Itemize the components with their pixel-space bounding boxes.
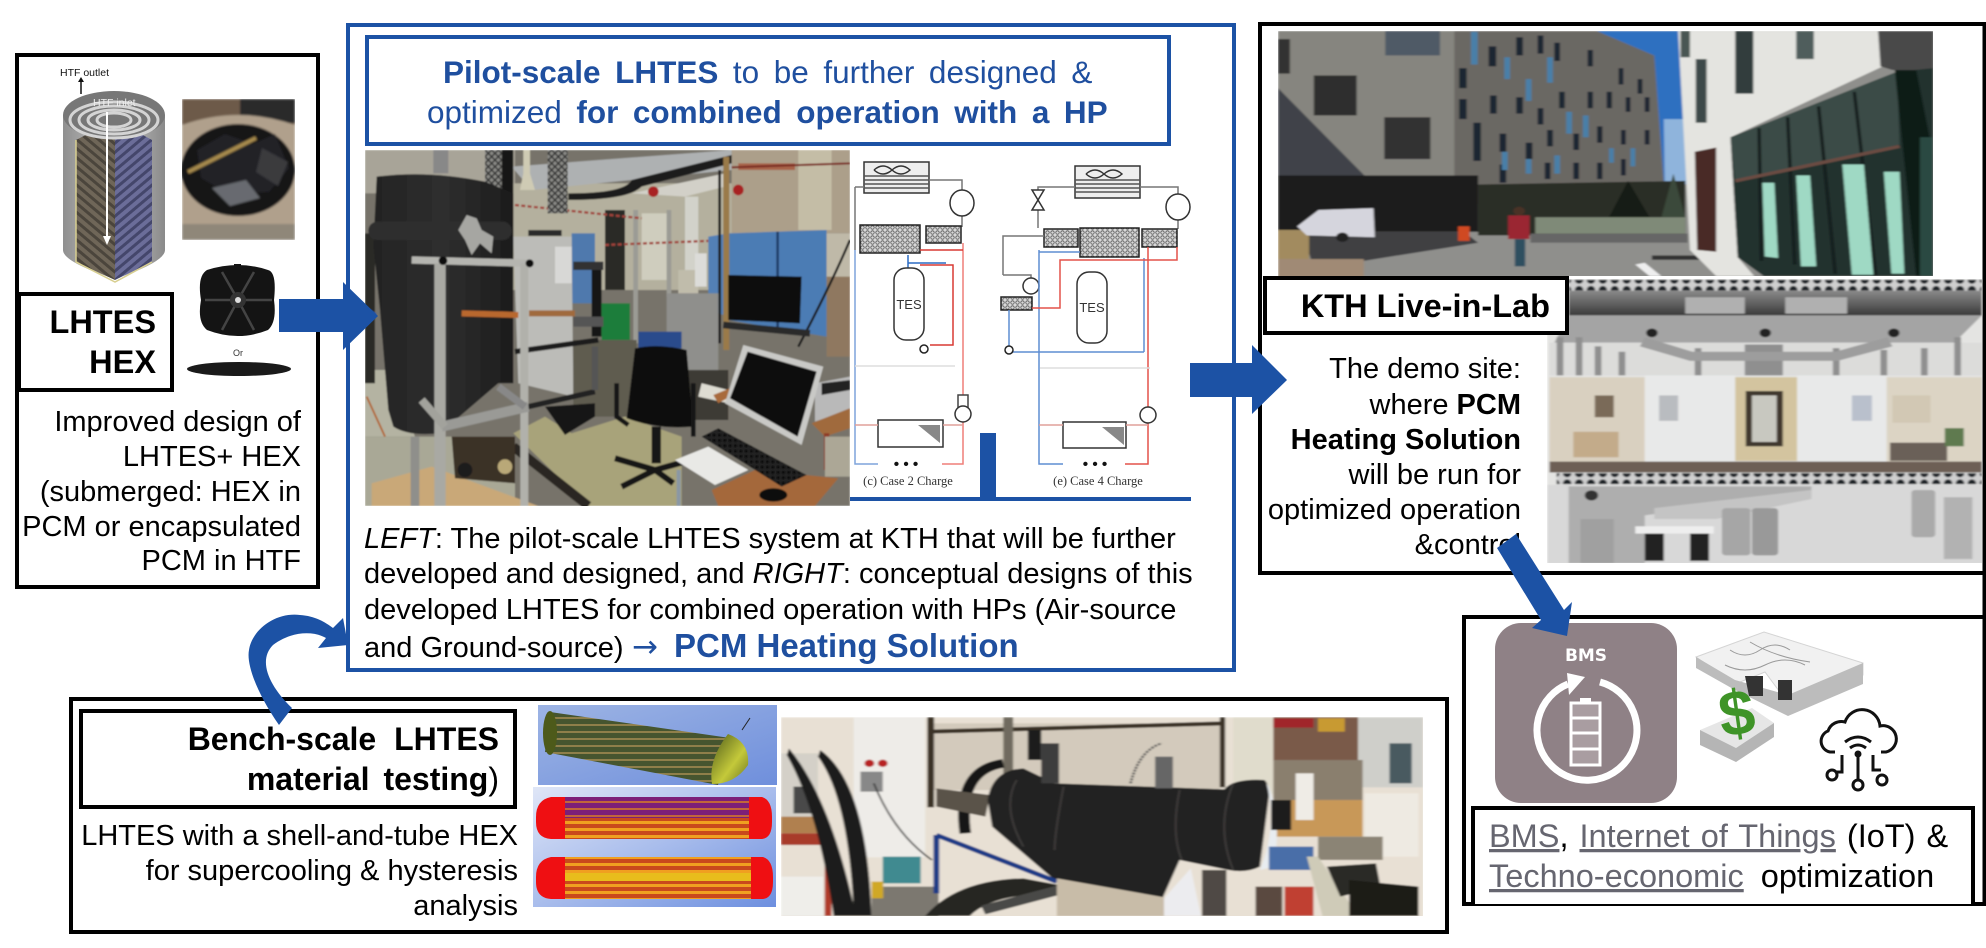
heading: LHTES HEX: LHTES <box>49 304 156 340</box>
text: improved design: LHTES+ HEX <box>123 441 301 473</box>
arrow: KTH to BMS <box>1497 534 1572 636</box>
label: BMS IoT text: BMS, Internet of Things (IoT) & <box>1489 818 1949 854</box>
heading: KTH Live-in-Lab: KTH Live-in-Lab <box>1301 288 1550 324</box>
heading: bench-scale: Bench-scale LHTES <box>188 721 499 757</box>
text: demo site <box>1268 353 1521 561</box>
icon: BMS battery <box>1495 623 1677 803</box>
panel: BMS, IoT, techno-economic <box>1464 573 1984 906</box>
image: shell-and-tube model <box>538 705 777 785</box>
floors <box>365 370 415 437</box>
icon: IoT cloud <box>1821 710 1896 790</box>
text: shell-and-tube: LHTES with a shell-and-tube HEX <box>81 820 518 852</box>
panel: bench-scale LHTES <box>71 699 1447 932</box>
chart: HP schematic: TES <box>1079 300 1105 315</box>
image: Live-in-Lab cross-section <box>1547 279 1986 566</box>
photo: opened storage tank <box>181 99 295 240</box>
text: pilot-scale description: developed LHTES for combined operation with HPs (Air-source <box>364 594 1176 626</box>
chart: CFD temperature contours <box>533 787 776 907</box>
chart: HP schematic: ••• <box>1083 456 1111 473</box>
chains and column <box>500 150 514 194</box>
text: improved design <box>22 406 302 577</box>
heading: bench-scale: material testing) <box>247 761 499 797</box>
chart: HP schematic: TES <box>896 297 922 312</box>
text: shell-and-tube: analysis <box>413 890 518 922</box>
chair <box>627 346 693 427</box>
icon: puzzle with dollar: $ <box>1714 675 1759 751</box>
chart: HP schematic: (e) Case 4 Charge <box>1053 474 1143 488</box>
text: pilot-scale description <box>364 523 1193 665</box>
text: pilot-scale description: → <box>632 629 658 665</box>
text: demo site: will be run for <box>1348 459 1521 491</box>
panel: LHTES HEX <box>17 55 318 587</box>
monitors and desk <box>728 275 802 323</box>
panel: pilot-scale LHTES <box>348 25 1234 670</box>
icon: BMS battery: BMS <box>1565 646 1607 666</box>
heading: pilot-scale <box>367 37 1169 144</box>
photo: pilot-scale lab <box>365 150 850 506</box>
text: improved design: (submerged: HEX in <box>40 476 301 508</box>
text: pilot-scale description: LEFT: The pilot-scale LHTES system at KTH that will be further <box>364 523 1176 555</box>
photo: KTH building exterior <box>1278 31 1935 278</box>
panel: KTH Live-in-Lab <box>1260 24 1986 573</box>
tank <box>373 174 513 434</box>
chart: HP schematic: ••• <box>894 456 922 473</box>
heading: LHTES HEX <box>19 294 172 390</box>
text: pilot-scale description: developed and designed, and RIGHT: conceptual designs of this <box>364 558 1193 590</box>
icon: cutaway HEX cylinder: HTF inlet <box>93 97 136 109</box>
icon: encapsulated PCM disc <box>187 264 291 376</box>
heading: KTH Live-in-Lab <box>1265 278 1567 333</box>
text: pilot-scale description: and Ground-source) <box>364 632 624 664</box>
arrow: pilot to KTH <box>1190 345 1287 414</box>
text: demo site: Heating Solution <box>1291 424 1521 456</box>
frame <box>412 260 532 263</box>
text: improved design: Improved design of <box>54 406 302 438</box>
text: demo site: where PCM <box>1368 389 1521 421</box>
text: demo site: The demo site: <box>1329 353 1521 385</box>
photo: bench-scale rig <box>781 717 1424 917</box>
text: demo site: optimized operation <box>1268 494 1521 526</box>
icon: cutaway HEX cylinder: HTF outlet <box>60 67 109 79</box>
label: BMS IoT text: Techno-economic optimization <box>1489 858 1934 894</box>
icon: puzzle with dollar <box>1696 632 1863 762</box>
text: demo site: &control <box>1415 529 1521 561</box>
icon: cutaway HEX cylinder <box>60 67 165 282</box>
text: pilot-scale description: PCM Heating Solution <box>674 627 1019 664</box>
text: improved design: PCM in HTF <box>142 545 301 577</box>
text: shell-and-tube: for supercooling & hysteresis <box>146 855 518 887</box>
arrow: HEX to pilot <box>279 282 378 350</box>
label: BMS IoT text <box>1473 808 1973 904</box>
icon: encapsulated PCM disc: Or <box>233 348 243 358</box>
heading: pilot-scale: Pilot-scale LHTES to be further designed & <box>443 54 1092 90</box>
back cabinets <box>572 233 595 303</box>
heading: pilot-scale: optimized for combined operation with a HP <box>427 94 1108 130</box>
chart: HP schematic: (c) Case 2 Charge <box>863 474 953 488</box>
chart: HP schematic <box>850 162 1191 501</box>
heading: LHTES HEX: HEX <box>89 344 156 380</box>
text: improved design: PCM or encapsulated <box>22 511 301 543</box>
text: shell-and-tube <box>81 820 518 922</box>
arrow: bench to pilot curved <box>249 615 348 725</box>
heading: bench-scale <box>81 711 515 807</box>
